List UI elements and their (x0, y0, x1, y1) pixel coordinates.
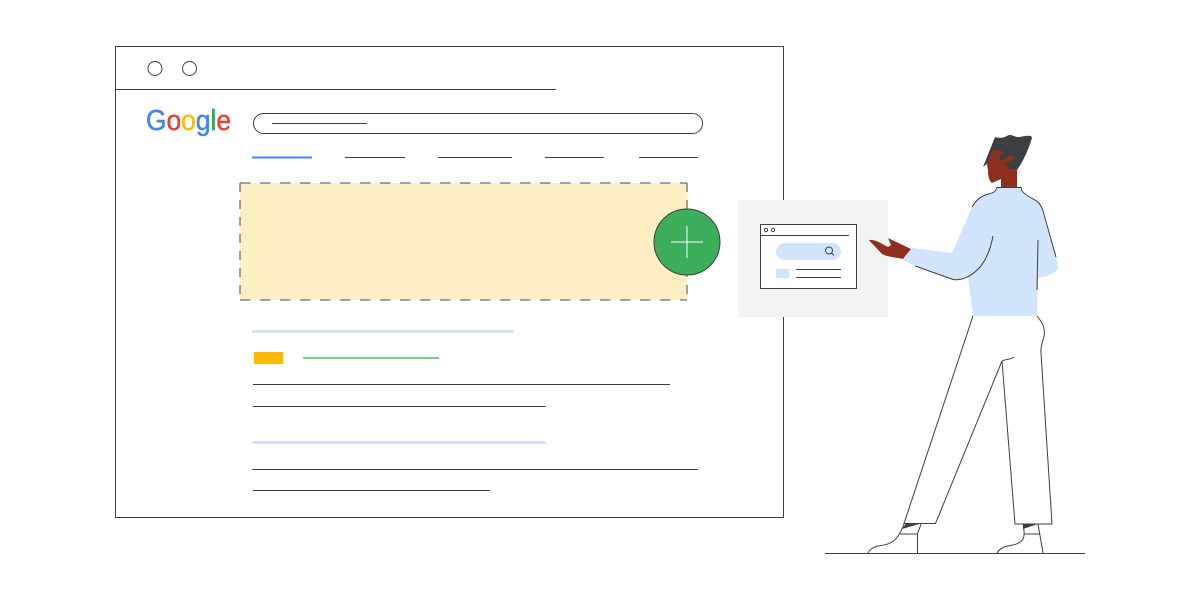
search result two (252, 441, 698, 490)
Google logo: Google (146, 105, 231, 137)
highlighted ad placeholder (240, 183, 687, 300)
panel: browser window (115, 46, 784, 518)
search bar (254, 114, 702, 134)
hair (983, 135, 1032, 170)
sweater outlines (915, 188, 1056, 290)
icon: green plus button (654, 209, 720, 275)
panel: grey card (738, 200, 888, 317)
person (825, 135, 1085, 554)
ground line (825, 552, 1085, 554)
address bar line (115, 88, 556, 90)
sweater (903, 187, 1058, 316)
left shoe (868, 524, 921, 553)
navigation tabs (252, 156, 698, 158)
hand (869, 238, 911, 259)
search result one (252, 330, 670, 406)
right shoe (997, 524, 1043, 553)
icon: window control left (148, 62, 162, 76)
icon: window control right (182, 62, 196, 76)
neck and face (987, 150, 1017, 187)
trousers and legs (904, 316, 1052, 524)
mini browser window (760, 224, 856, 288)
